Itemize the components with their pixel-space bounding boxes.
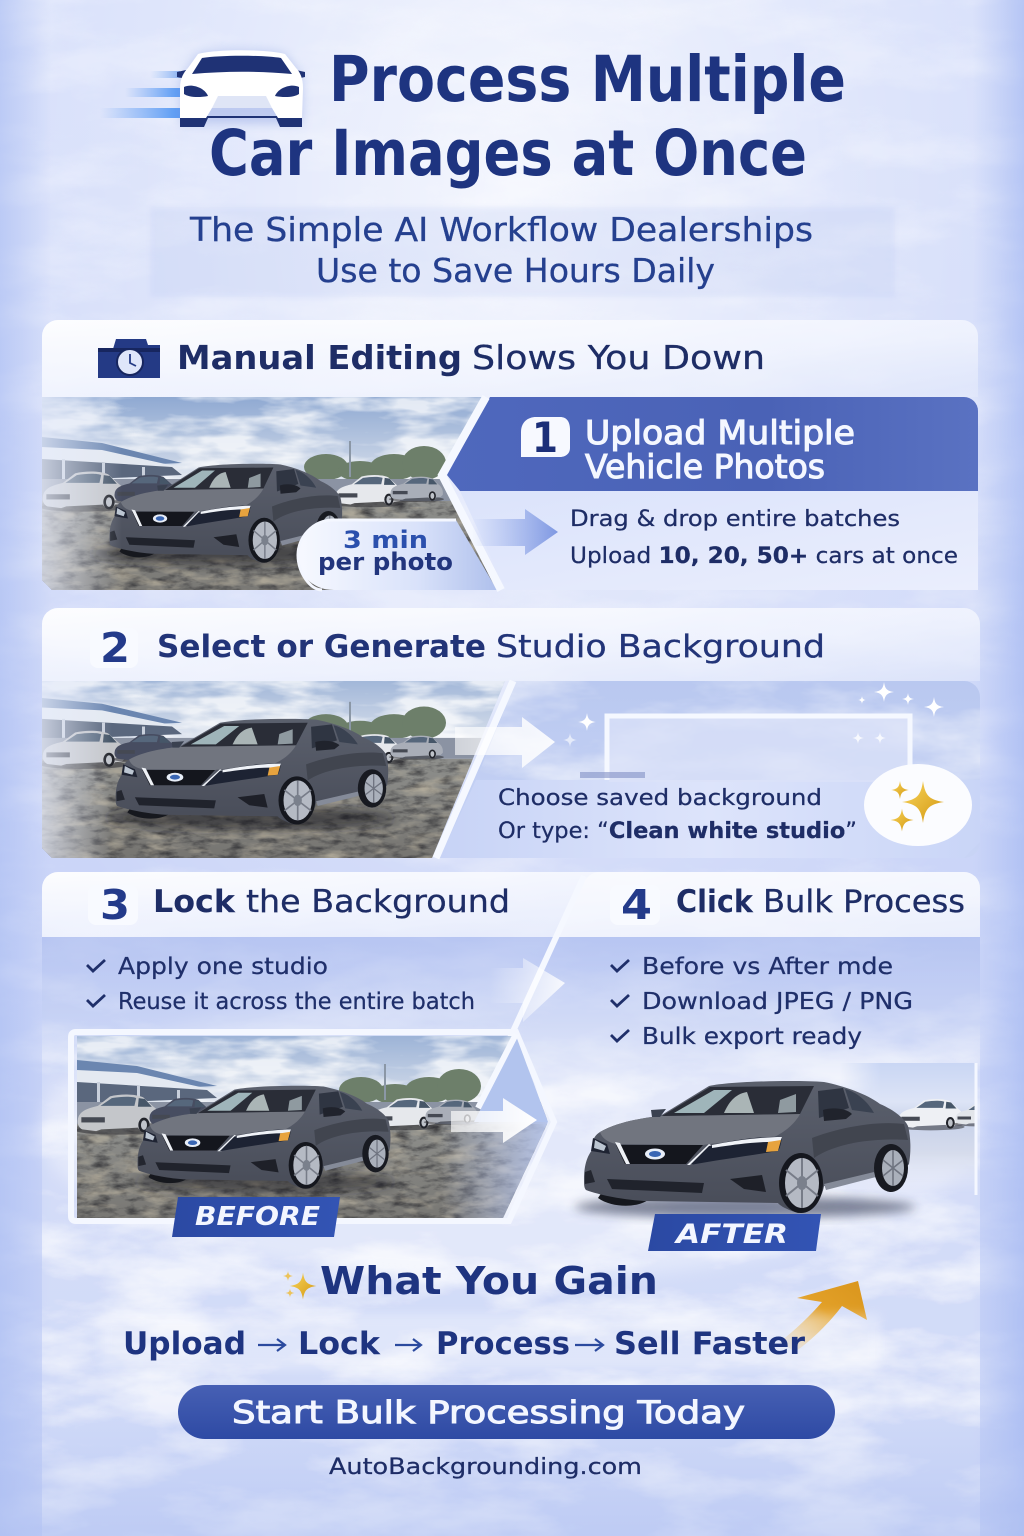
badge: step 1: 1 (532, 413, 558, 462)
label: after (648, 1214, 821, 1251)
title: Car Images at Once (209, 117, 807, 190)
step 1 heading: Upload Multiple (585, 413, 855, 452)
step 1 description: Upload 10, 20, 50+ cars at once (570, 544, 958, 569)
badge: step 4 (610, 881, 660, 929)
website address: AutoBackgrounding.com (329, 1455, 642, 1480)
after photo (575, 1063, 1004, 1218)
step 3 heading: the Background (246, 884, 510, 920)
step 1 banner (447, 397, 978, 491)
step 2 description: Choose saved background (498, 786, 822, 811)
callout: 3 min per photo (298, 520, 497, 590)
lower content column background (0, 937, 1024, 1536)
step 4 heading: Click (676, 884, 754, 920)
badge: step 4: 4 (621, 881, 652, 929)
step 1 description: Drag & drop entire batches (570, 507, 900, 532)
subtitle band: The Simple AI Workflow Dealerships (189, 210, 813, 249)
badge: step 3: 3 (100, 881, 130, 929)
workflow line: Process (436, 1326, 570, 1362)
callout: 3 min per photo: per photo (318, 548, 453, 576)
workflow line: Upload (123, 1326, 246, 1362)
label: before: BEFORE (195, 1202, 320, 1232)
step 2 description (498, 786, 857, 844)
call to action button: Start Bulk Processing Today (232, 1395, 745, 1431)
badge: step 3 (88, 881, 138, 929)
step 4 heading (676, 884, 965, 920)
workflow line (100, 1314, 880, 1370)
checklist: step 4: Bulk export ready (642, 1024, 862, 1050)
chevron divider (436, 681, 513, 858)
checklist: step 4: Before vs After mde (642, 954, 893, 980)
label: before (172, 1197, 340, 1237)
step 2 heading (157, 629, 825, 665)
callout: 3 min per photo: 3 min (343, 526, 428, 554)
step 1 heading (585, 413, 855, 486)
panel: manual editing and step 1 (42, 320, 978, 592)
checklist: step 3: Reuse it across the entire batch (118, 989, 475, 1015)
badge: step 2 (90, 624, 138, 672)
checklist: step 4: Download JPEG / PNG (642, 989, 913, 1015)
badge: step 2: 2 (100, 624, 130, 672)
step 3 heading: Lock (153, 884, 236, 920)
header icon: car with speed lines (100, 50, 305, 127)
title: Process Multiple (329, 43, 846, 116)
workflow line: Sell Faster (614, 1326, 806, 1362)
studio backdrop frame (580, 716, 911, 782)
step 2 heading: Studio Background (496, 629, 825, 665)
panel: step 3 and step 4 headers (42, 872, 980, 937)
title (209, 43, 846, 190)
icon: gold sparkles in circle (864, 764, 972, 846)
arrow: before to after (451, 1098, 537, 1143)
photo: car in parking lot (42, 681, 505, 858)
step 4 (610, 881, 965, 1050)
sparkles around the frame (563, 682, 944, 747)
arrow: to studio (455, 717, 555, 768)
step 2 description: Or type: “Clean white studio” (498, 819, 857, 844)
what you gain heading: What You Gain (320, 1259, 658, 1303)
badge: step 1 (521, 413, 570, 462)
studio panel (440, 681, 980, 858)
step 3 heading (153, 884, 510, 920)
panel heading: Slows You Down (472, 338, 765, 377)
workflow line: Lock (298, 1326, 381, 1362)
icon: orange growth arrow (780, 1281, 867, 1352)
checklist: step 3: Apply one studio (118, 954, 328, 980)
step 1 heading: Vehicle Photos (585, 447, 825, 486)
before photo (68, 1029, 557, 1224)
panel heading (177, 338, 765, 377)
icon: camera with clock (98, 339, 160, 378)
step 4 heading: Bulk Process (763, 884, 965, 920)
panel: step 2 background (40, 608, 980, 878)
call to action button (178, 1385, 835, 1439)
chevron divider (442, 397, 501, 590)
checklist: step 3 (87, 954, 475, 1015)
arrow: to step 1 text (472, 509, 558, 555)
panel heading: Manual Editing (177, 338, 462, 377)
photo: car in parking lot (42, 397, 494, 590)
step 3 (87, 881, 565, 1022)
right lower panel (460, 491, 978, 590)
arrow: step 3 to step 4 (490, 958, 565, 1022)
checklist: step 4 (611, 954, 913, 1050)
subtitle band: Use to Save Hours Daily (316, 251, 715, 290)
step 2 heading: Select or Generate (157, 629, 486, 665)
slanted divider between steps 3 and 4 (478, 876, 584, 1108)
subtitle band (150, 207, 895, 297)
step 1 description (570, 507, 958, 569)
label: after: AFTER (674, 1219, 788, 1250)
